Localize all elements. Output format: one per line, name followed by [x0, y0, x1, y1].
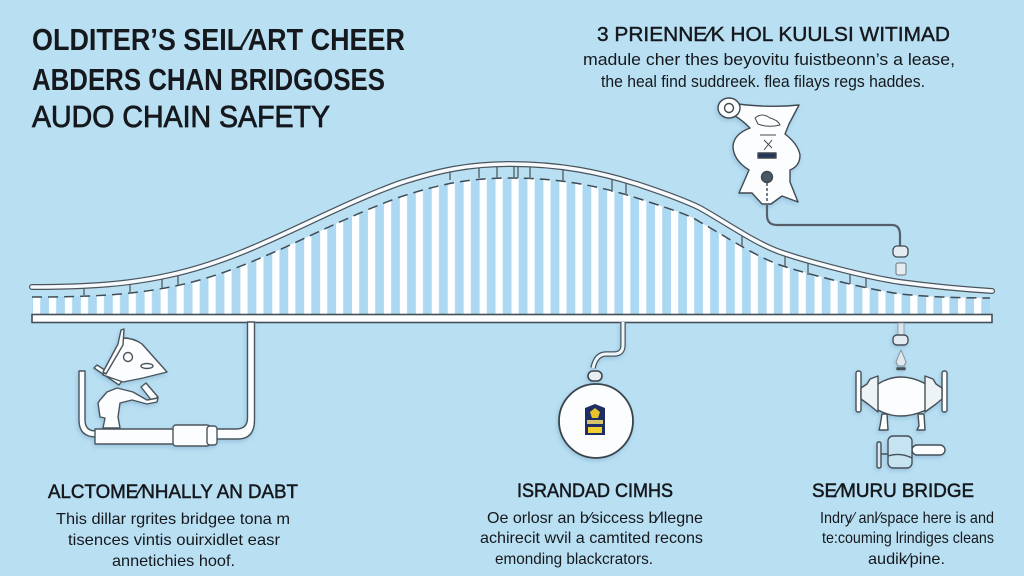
title: ABDERS CHAN BRIDGOSES [32, 62, 385, 97]
coupler [173, 425, 210, 446]
mascot arm [94, 365, 122, 385]
pipe: top mascot to cable [767, 205, 908, 275]
disc [559, 384, 633, 458]
left caption [48, 482, 298, 570]
cable ticks [84, 164, 866, 297]
left hook pipe [79, 371, 96, 437]
icon: small valve [877, 436, 945, 468]
right caption: te:couming lrindiges cleans [822, 530, 994, 547]
badge [585, 404, 605, 435]
chain [766, 183, 768, 202]
right caption: Indry⁄ anl⁄space here is and [820, 510, 994, 527]
connector [893, 246, 908, 257]
icon: right valve [856, 323, 947, 430]
top right text block: 3 PRIENNE⁄K HOL KUULSI WITIMAD [597, 24, 950, 46]
title: OLDITER’S SEIL⁄ART CHEER [32, 22, 405, 57]
title [32, 22, 405, 134]
mascot head [103, 338, 167, 382]
top right text block: the heal find suddreek. flea filays regs haddes. [601, 72, 925, 91]
mascot neck bar [141, 383, 158, 401]
top right text block: madule cher thes beyovitu fuistbeonn’s a lease, [583, 50, 955, 69]
left caption: tisences vintis ouirxidlet easr [68, 532, 281, 549]
bridge hangers [32, 178, 990, 314]
mascot body [98, 388, 158, 428]
barrel [868, 377, 934, 416]
mascot body [733, 104, 800, 204]
ring [588, 371, 602, 381]
middle caption: Oe orlosr an b⁄siccess b⁄llegne [487, 510, 703, 527]
icon: top mascot [718, 98, 800, 204]
top connector [898, 323, 904, 335]
left caption: annetichies hoof. [112, 553, 235, 570]
icon: left mascot on pipe [79, 322, 254, 446]
vertical pipe [216, 322, 254, 439]
top right text block [583, 24, 955, 91]
face lines [755, 115, 780, 150]
left caption: This dillar rgrites bridgee tona m [56, 511, 290, 528]
eye button [762, 172, 772, 182]
middle caption: ISRANDAD CIMHS [517, 481, 673, 502]
inner dashed chord [32, 178, 990, 298]
feet [879, 414, 925, 430]
tube [95, 429, 175, 444]
hanger pipe [593, 322, 623, 368]
right caption [812, 481, 994, 568]
middle caption: emonding blackcrators. [495, 551, 653, 568]
middle caption: achirecit wvil a camtited recons [480, 530, 703, 547]
mascot stick [103, 329, 124, 374]
right caption: SE⁄MURU BRIDGE [812, 481, 974, 502]
side caps [861, 376, 878, 412]
main cable [32, 164, 992, 291]
icon: middle medallion [559, 322, 633, 458]
middle caption [480, 481, 703, 568]
right caption: audik⁄pine. [868, 551, 945, 568]
scroll [718, 98, 740, 118]
deck [32, 314, 992, 322]
mascot eye [124, 352, 132, 362]
flanges [856, 371, 861, 412]
scale plate [758, 153, 776, 158]
left caption: ALCTOME⁄NHALLY AN DABT [48, 482, 298, 503]
title: AUDO CHAIN SAFETY [32, 99, 330, 134]
bridge [32, 164, 992, 322]
